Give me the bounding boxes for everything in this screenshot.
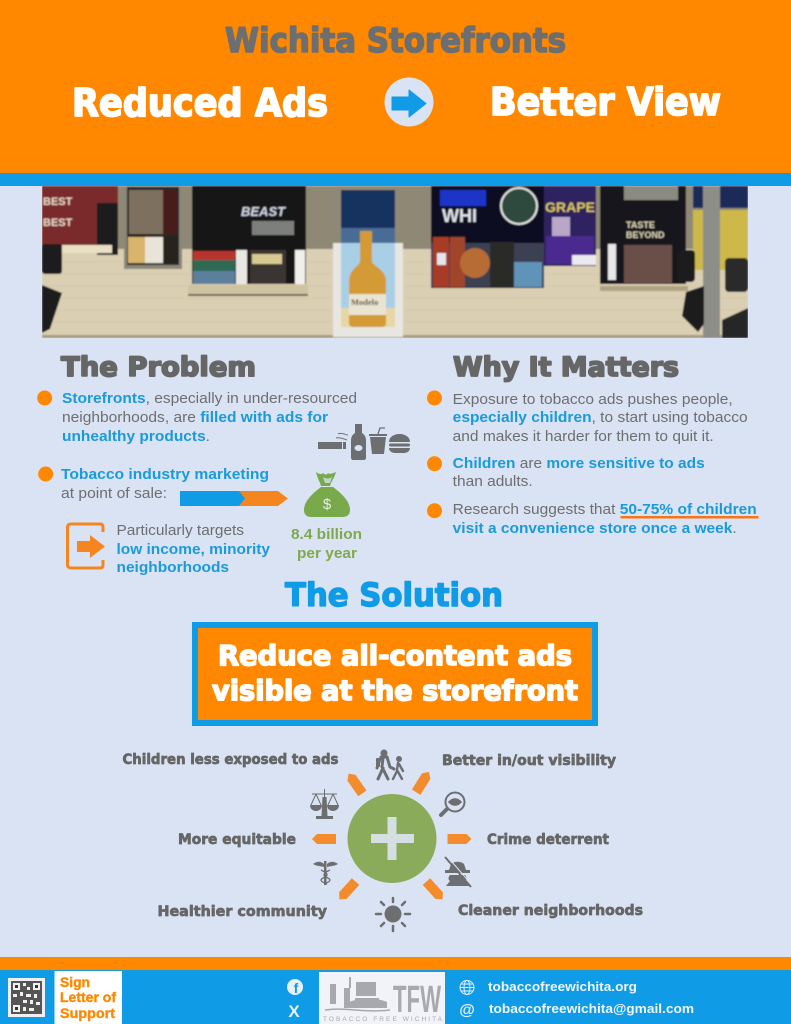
storefront photo: WHI	[442, 206, 477, 226]
bullet text: exposure: and makes it harder for them to quit it.	[453, 428, 714, 445]
label: children less exposed: Children less exposed to ads	[122, 752, 338, 768]
icon: x: X	[288, 1002, 300, 1021]
sign letter of support: Sign	[60, 974, 90, 990]
icon: sun	[376, 898, 410, 931]
text: targets neighborhoods: low income, minority	[116, 541, 271, 558]
heading: the problem: The Problem	[61, 352, 256, 383]
icon: at sign: @	[459, 1002, 475, 1019]
bullet text: exposure: especially children , to start using tobacco	[453, 409, 748, 426]
icon: magnifier with eye	[441, 792, 464, 815]
callout: solution box: Reduce all-content ads	[218, 639, 572, 672]
icons: unhealthy products	[318, 424, 410, 460]
label: healthier community: Healthier community	[158, 904, 327, 920]
arrow: marketing bar	[180, 491, 288, 506]
storefront photo	[42, 186, 748, 338]
storefront photo: GRAPE	[545, 199, 595, 215]
heading: reduced ads: Reduced Ads	[72, 81, 328, 125]
icon: facebook	[287, 979, 303, 996]
icon: facebook: f	[294, 980, 299, 996]
label: crime deterrent: Crime deterrent	[487, 832, 609, 848]
label: more equitable: More equitable	[178, 832, 296, 848]
heading: better view: Better View	[490, 80, 721, 124]
icon: caduceus	[313, 861, 338, 885]
stat: 8.4 billion per year	[291, 527, 362, 562]
sign letter of support	[54, 971, 122, 1024]
title: Wichita Storefronts	[225, 21, 566, 61]
icon: globe	[460, 980, 474, 994]
bullet text: storefronts: Storefronts, especially in under-resourced	[62, 390, 357, 407]
icon: scales of justice	[310, 789, 339, 819]
bullet text: tobacco industry marketing	[38, 466, 269, 502]
bullet text: tobacco industry marketing: Tobacco industry marketing	[61, 466, 269, 483]
icon: plus circle	[348, 794, 436, 883]
logo: tobacco free wichita: TFW	[393, 979, 441, 1021]
storefront photo: BEYOND	[626, 230, 665, 240]
diagram: benefits	[122, 750, 643, 931]
storefront photo: Modelo	[351, 297, 378, 307]
icon: money bag	[304, 472, 350, 517]
heading: why it matters: Why It Matters	[453, 352, 679, 383]
bullet text: exposure	[427, 390, 748, 445]
bullet text: tobacco industry marketing: at point of sale:	[61, 485, 167, 502]
header banner	[0, 0, 791, 186]
sign letter of support: Letter of	[60, 989, 116, 1005]
stat: 8.4 billion per year: per year	[297, 546, 357, 562]
text: targets neighborhoods: neighborhoods	[116, 559, 229, 576]
icon: arrow entering box	[68, 524, 105, 568]
stat: 8.4 billion per year: 8.4 billion	[291, 527, 362, 543]
panel: the problem	[37, 352, 410, 576]
bullet text: research: Research suggests that 50-75% of children	[453, 501, 757, 518]
bullet text: exposure: Exposure to tobacco ads pushes people,	[453, 391, 733, 408]
icon: money bag: $	[323, 496, 332, 513]
text: targets neighborhoods: Particularly targets	[116, 522, 244, 539]
icon: walking adult and child	[376, 750, 403, 779]
sign letter of support: Support	[60, 1005, 115, 1021]
qr code	[8, 978, 45, 1017]
bullet text: storefronts	[37, 390, 357, 445]
label: cleaner neighborhoods: Cleaner neighborhoods	[458, 903, 643, 919]
icon: crossed-out burglar	[445, 855, 472, 887]
callout: solution box: visible at the storefront	[212, 674, 578, 707]
text: targets neighborhoods	[116, 522, 271, 576]
logo: tobacco free wichita	[319, 972, 445, 1024]
bullet text: research: visit a convenience store once a week .	[453, 520, 737, 537]
bullet text: children sensitive	[427, 455, 705, 490]
footer	[0, 957, 791, 1024]
bullet text: storefronts: unhealthy products .	[62, 428, 210, 445]
arrows: radiating	[312, 769, 472, 903]
label: better visibility: Better in/out visibility	[442, 753, 616, 769]
website: tobaccofreewichita.org	[488, 979, 637, 994]
callout: solution box	[195, 625, 595, 723]
heading: the solution: The Solution	[285, 576, 503, 614]
storefront photo: BEAST	[241, 204, 286, 219]
panel: why it matters	[427, 352, 758, 537]
bullet text: children sensitive: than adults.	[453, 473, 533, 490]
email: tobaccofreewichita@gmail.com	[489, 1001, 694, 1016]
bullet text: research	[427, 501, 758, 537]
icon: arrow in circle	[384, 78, 434, 126]
storefront photo: BEST	[43, 217, 73, 229]
bullet text: storefronts: neighborhoods, are filled with ads for	[62, 409, 328, 426]
storefront photo: TASTE	[626, 220, 655, 230]
logo: tobacco free wichita: TOBACCO FREE WICHITA	[323, 1016, 443, 1023]
storefront photo: BEST	[43, 196, 73, 208]
bullet text: children sensitive: Children are more sensitive to ads	[453, 455, 705, 472]
